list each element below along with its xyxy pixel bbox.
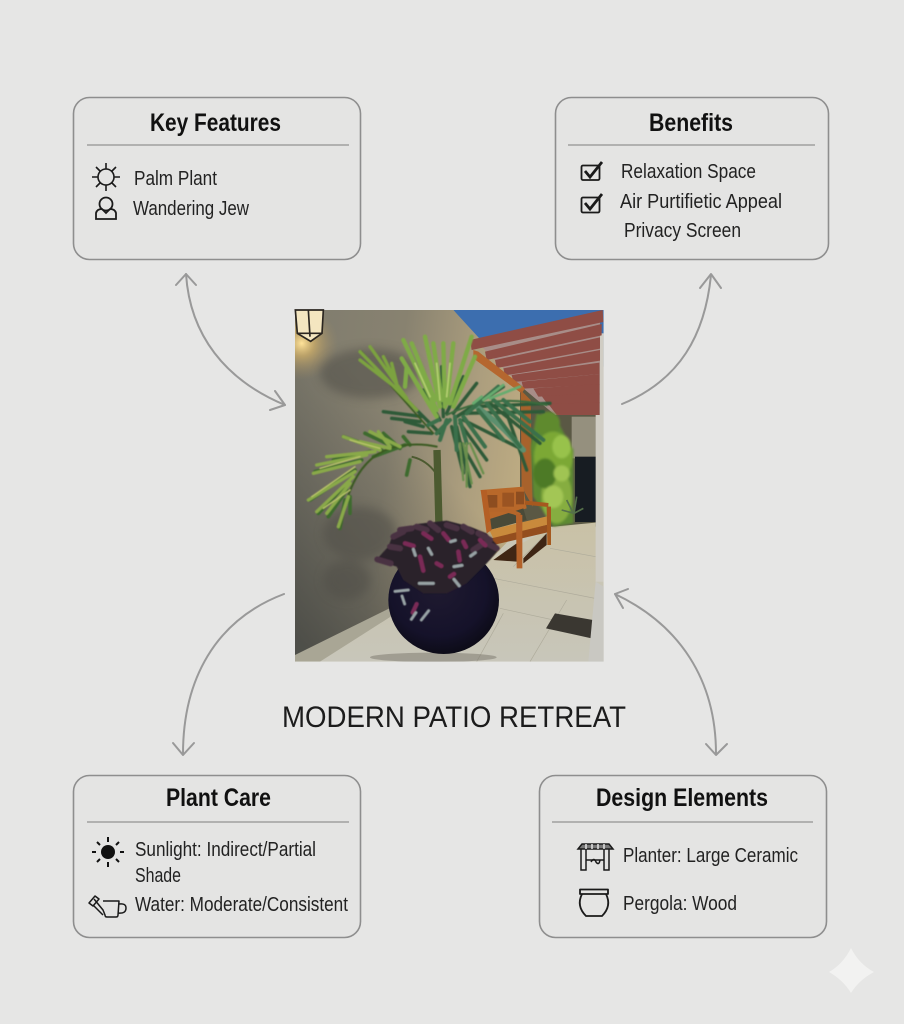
text: privacy screen: Privacy Screen [624,220,741,242]
icon: filled sun [92,837,124,867]
icon: pergola bench [578,844,613,870]
arrow: key features to photo [176,274,285,410]
sky [453,310,604,367]
palm shadows on wall [320,348,420,600]
text: pergola: Pergola: Wood [623,893,737,915]
icon: checkbox two [582,194,602,212]
floor [486,522,596,578]
palm fronds [308,337,550,528]
icon: checkbox one [582,162,602,180]
floor drain [546,613,597,638]
back wall [520,387,600,527]
wandering jew foliage [376,521,500,620]
right column [596,333,604,582]
pergola backing [483,322,600,415]
text: planter: Planter: Large Ceramic [623,845,798,867]
arrow: photo to plant care [173,594,284,755]
trunk [437,450,439,527]
frond dark layer [378,367,550,487]
heading: plant care: Plant Care [166,784,271,812]
heading: key features: Key Features [150,109,281,137]
text: air purtifietic appeal: Air Purtifietic Appeal [620,191,782,213]
heading: benefits: Benefits [649,109,733,137]
text: palm plant: Palm Plant [134,168,217,190]
frond rachis [347,442,438,496]
lamp glow [295,318,332,374]
heading: design elements: Design Elements [596,784,768,812]
arrow: photo to benefits [622,274,721,404]
panel: design elements [540,776,826,938]
panel: benefits [556,98,828,260]
text: relaxation space: Relaxation Space [621,161,756,183]
baseboard [295,608,391,662]
dark louvered door [575,457,597,522]
panel: key features [74,98,360,260]
arrow: photo to design elements [615,589,727,755]
text: sunlight: Sunlight: Indirect/Partial [135,839,316,861]
photo base [321,526,604,661]
panel: plant care [74,776,360,938]
icon: watering can [89,896,126,917]
vertical garden [531,412,573,527]
small plant [562,497,583,513]
black round planter [370,653,497,662]
frond bright layer [360,347,417,410]
photo: palm in black planter on patio [265,307,604,662]
wall lamp [295,310,323,341]
title: MODERN PATIO RETREAT [282,701,626,734]
icon: sun outline [92,163,120,191]
icon: person [96,198,116,219]
wood pergola [470,310,603,415]
text: wandering jew: Wandering Jew [133,198,249,220]
wooden bench [481,487,551,568]
text: water: Water: Moderate/Consistent [135,894,348,916]
wooden post [521,390,533,507]
icon: sparkle watermark [829,948,874,993]
icon: pot [580,890,608,916]
side wall [295,310,535,662]
text: shade: Shade [135,865,181,887]
